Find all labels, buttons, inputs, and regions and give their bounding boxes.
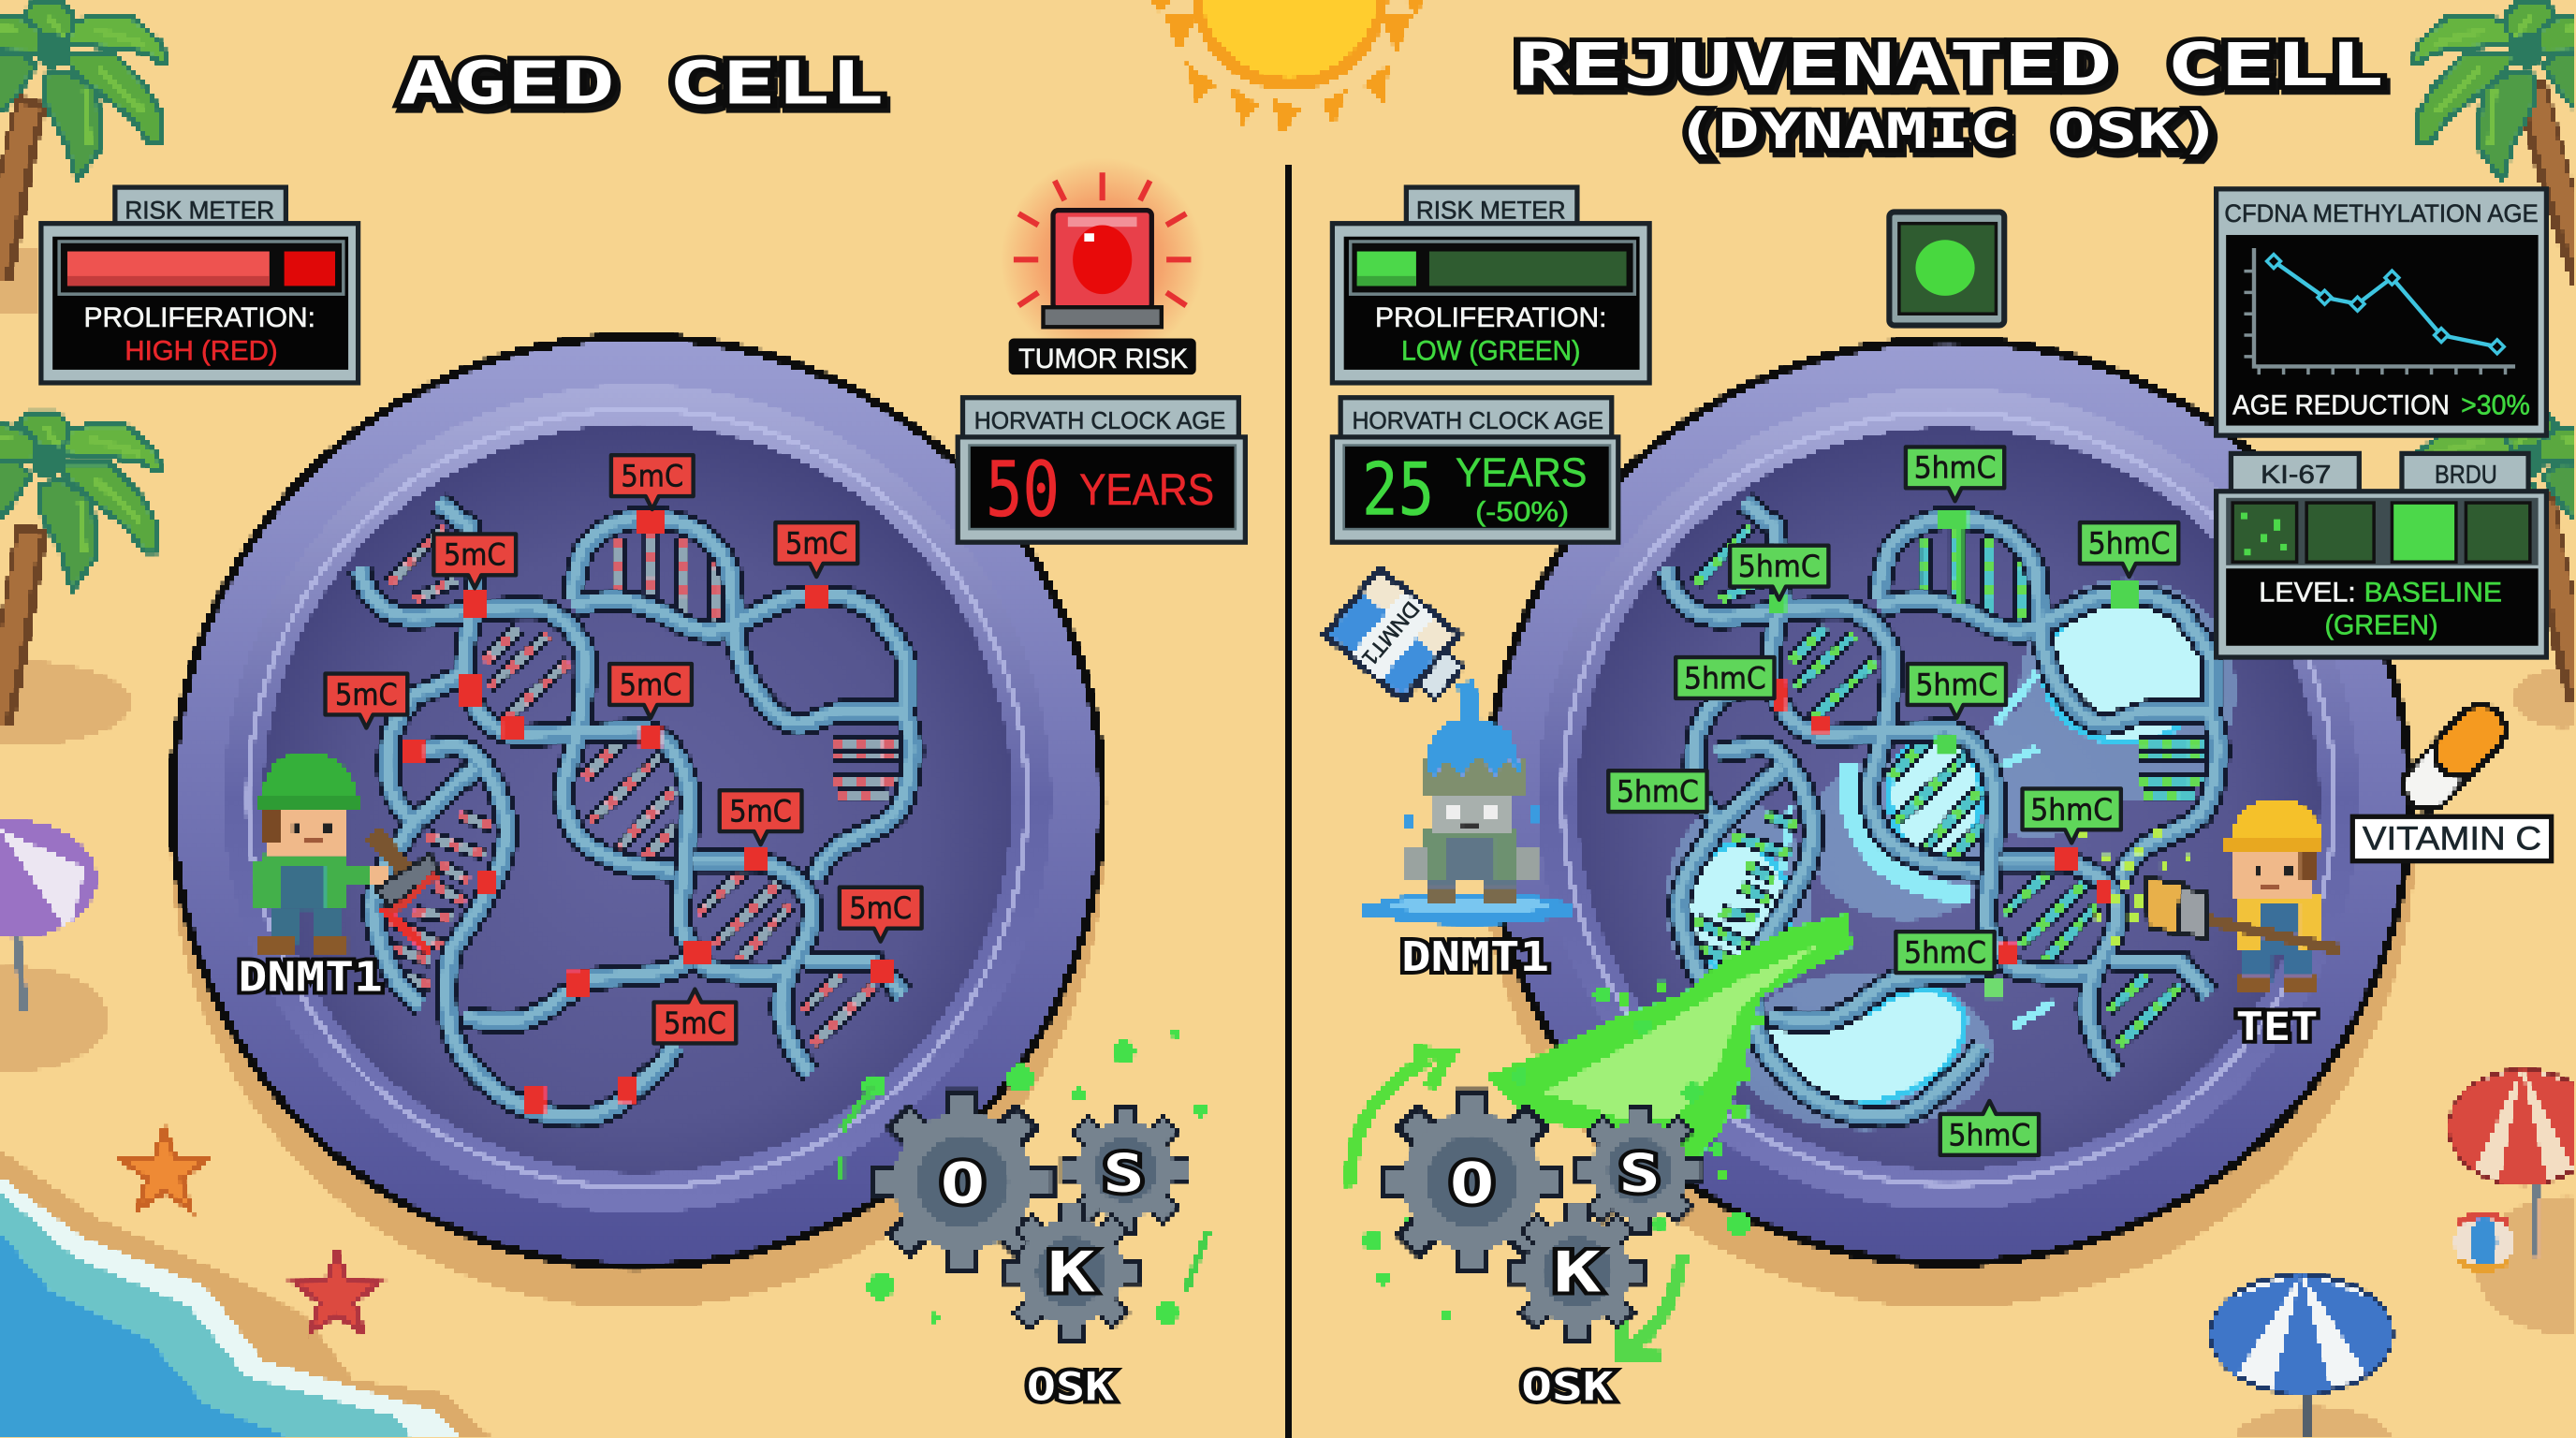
panel: Horvath clock aged: 50: [986, 447, 1060, 535]
green beam: [1486, 914, 1853, 1164]
icon: green status light: [1889, 212, 2004, 326]
arrow: rotation left: [1352, 1051, 1449, 1186]
purple umbrella: [0, 820, 97, 1010]
5mC methylation tags: 5mC: [785, 527, 848, 561]
OSK gears: aged cell: O: [941, 1152, 985, 1217]
red starfish: [295, 1252, 379, 1332]
aged cell body with DNA: [171, 337, 1104, 1308]
panel: Horvath clock rejuvenated: HORVATH CLOCK AGE: [1352, 406, 1603, 434]
panel: risk meter rejuvenated: PROLIFERATION:: [1375, 302, 1606, 333]
panel: risk meter aged: RISK METER: [124, 195, 274, 224]
panel: Horvath clock rejuvenated: YEARS: [1456, 450, 1587, 496]
worker: frozen DNMT1: [1362, 718, 1573, 981]
5hmC demethylation tags: 5hmC: [2030, 794, 2113, 828]
palm tree top right: [2413, 4, 2576, 279]
panel: Horvath clock rejuvenated: [1332, 398, 1618, 542]
label: vitamin C: VITAMIN C: [2363, 820, 2541, 857]
icon: vitamin C pill: [2352, 729, 2552, 861]
label: tumor risk: [1009, 339, 1196, 374]
arrow: rotation right: [1620, 1254, 1682, 1357]
5mC methylation tags: 5mC: [444, 539, 506, 573]
title: aged cell: AGED CELL: [399, 49, 884, 118]
5hmC demethylation tags: 5hmC: [1684, 662, 1766, 696]
panel: cfDNA methylation age chart: >30%: [2461, 389, 2530, 420]
panel: risk meter aged: PROLIFERATION:: [84, 302, 315, 333]
OSK gears: rejuvenated cell: K: [1553, 1241, 1601, 1306]
5mC methylation tags: 5mC: [729, 796, 792, 829]
5mC methylation tags: 5mC: [621, 461, 683, 494]
panel: KI-67 and BRDU levels: BRDU: [2435, 460, 2497, 489]
OSK gears: aged cell: [842, 1029, 1208, 1409]
icon: red siren with tumor risk: TUMOR RISK: [1018, 344, 1188, 374]
palm tree top left: [0, 4, 166, 279]
panel: Horvath clock aged: YEARS: [1079, 465, 1214, 515]
5hmC demethylation tags: 5hmC: [1914, 452, 1996, 486]
icon: red siren with tumor risk: [1001, 157, 1204, 374]
panel: rejuvenated cell: [1482, 340, 2415, 1308]
center divider: [1285, 165, 1292, 1438]
ocean waves: [0, 1151, 501, 1438]
panel: cfDNA methylation age chart: CFDNA METHYLATION AGE: [2224, 198, 2539, 227]
OSK gears: aged cell: OSK: [1027, 1363, 1115, 1409]
title: rejuvenated cell: REJUVENATED CELL: [1515, 30, 2384, 99]
title: rejuvenated cell: [1515, 30, 2384, 160]
OSK gears: aged cell: S: [1104, 1143, 1144, 1204]
panel: cfDNA methylation age chart: [2217, 189, 2546, 435]
5mC methylation tags: 5mC: [620, 668, 681, 702]
5hmC demethylation tags: [1608, 447, 2178, 1155]
OSK gears: aged cell: K: [1047, 1241, 1095, 1306]
5mC methylation tags: 5mC: [335, 679, 398, 712]
label: vitamin C: [2352, 816, 2552, 861]
panel: aged cell: [171, 337, 1104, 1308]
line chart: [2244, 248, 2515, 374]
OSK gears: rejuvenated cell: [1352, 986, 1749, 1409]
5hmC demethylation tags: 5hmC: [1738, 550, 1821, 584]
OSK gears: rejuvenated cell: O: [1450, 1152, 1494, 1217]
sun: [1147, 0, 1429, 135]
panel: cfDNA methylation age chart: AGE REDUCTION: [2232, 389, 2450, 420]
5mC methylation tags: 5mC: [849, 892, 912, 926]
bottle: DNMT1 inhibitor: DNMT1: [1357, 597, 1425, 670]
orange starfish: [122, 1129, 207, 1209]
panel: risk meter rejuvenated: RISK METER: [1416, 195, 1566, 224]
panel: risk meter aged: [41, 187, 359, 383]
title: rejuvenated cell: (DYNAMIC OSK): [1676, 103, 2221, 160]
5hmC demethylation tags: 5hmC: [2088, 527, 2170, 561]
panel: risk meter rejuvenated: LOW (GREEN): [1401, 335, 1580, 366]
red umbrella: [2445, 1068, 2576, 1257]
panel: KI-67 and BRDU levels: LEVEL:: [2259, 577, 2356, 608]
panel: Horvath clock aged: [958, 398, 1245, 542]
panel: KI-67 and BRDU levels: [2217, 453, 2546, 657]
beach ball: [2454, 1212, 2513, 1271]
OSK gears: rejuvenated cell: S: [1619, 1143, 1661, 1204]
panel: KI-67 and BRDU levels: (GREEN): [2324, 609, 2438, 640]
5hmC demethylation tags: 5hmC: [1949, 1119, 2030, 1152]
panel: Horvath clock rejuvenated: (-50%): [1475, 496, 1569, 527]
palm tree middle left: [0, 413, 161, 723]
worker: frozen DNMT1: DNMT1: [1401, 933, 1549, 981]
panel: risk meter rejuvenated: [1332, 187, 1649, 383]
palm tree middle right: [2413, 414, 2576, 698]
panel: KI-67 and BRDU levels: BASELINE: [2364, 577, 2502, 608]
panel: Horvath clock rejuvenated: 25: [1362, 448, 1434, 532]
worker: TET with brush hammer: [2145, 799, 2339, 1049]
5hmC demethylation tags: 5hmC: [1617, 775, 1699, 809]
worker: DNMT1 with hammer: DNMT1: [238, 953, 383, 1001]
worker: DNMT1 with hammer: [238, 753, 439, 1001]
panel: KI-67 and BRDU levels: KI-67: [2261, 460, 2331, 489]
panel: risk meter aged: HIGH (RED): [124, 335, 278, 366]
OSK gears: rejuvenated cell: OSK: [1521, 1363, 1614, 1409]
5mC methylation tags: [326, 455, 922, 1043]
rejuvenated cell body with DNA and glow: [1482, 340, 2415, 1308]
5hmC demethylation tags: 5hmC: [1904, 936, 1986, 970]
bottle: DNMT1 inhibitor: [1325, 569, 1477, 764]
worker: TET with brush hammer: TET: [2236, 1004, 2318, 1049]
panel: Horvath clock aged: HORVATH CLOCK AGE: [974, 406, 1225, 434]
5hmC demethylation tags: 5hmC: [1915, 668, 1998, 702]
5mC methylation tags: 5mC: [664, 1007, 726, 1041]
blue umbrella: [2208, 1273, 2395, 1438]
